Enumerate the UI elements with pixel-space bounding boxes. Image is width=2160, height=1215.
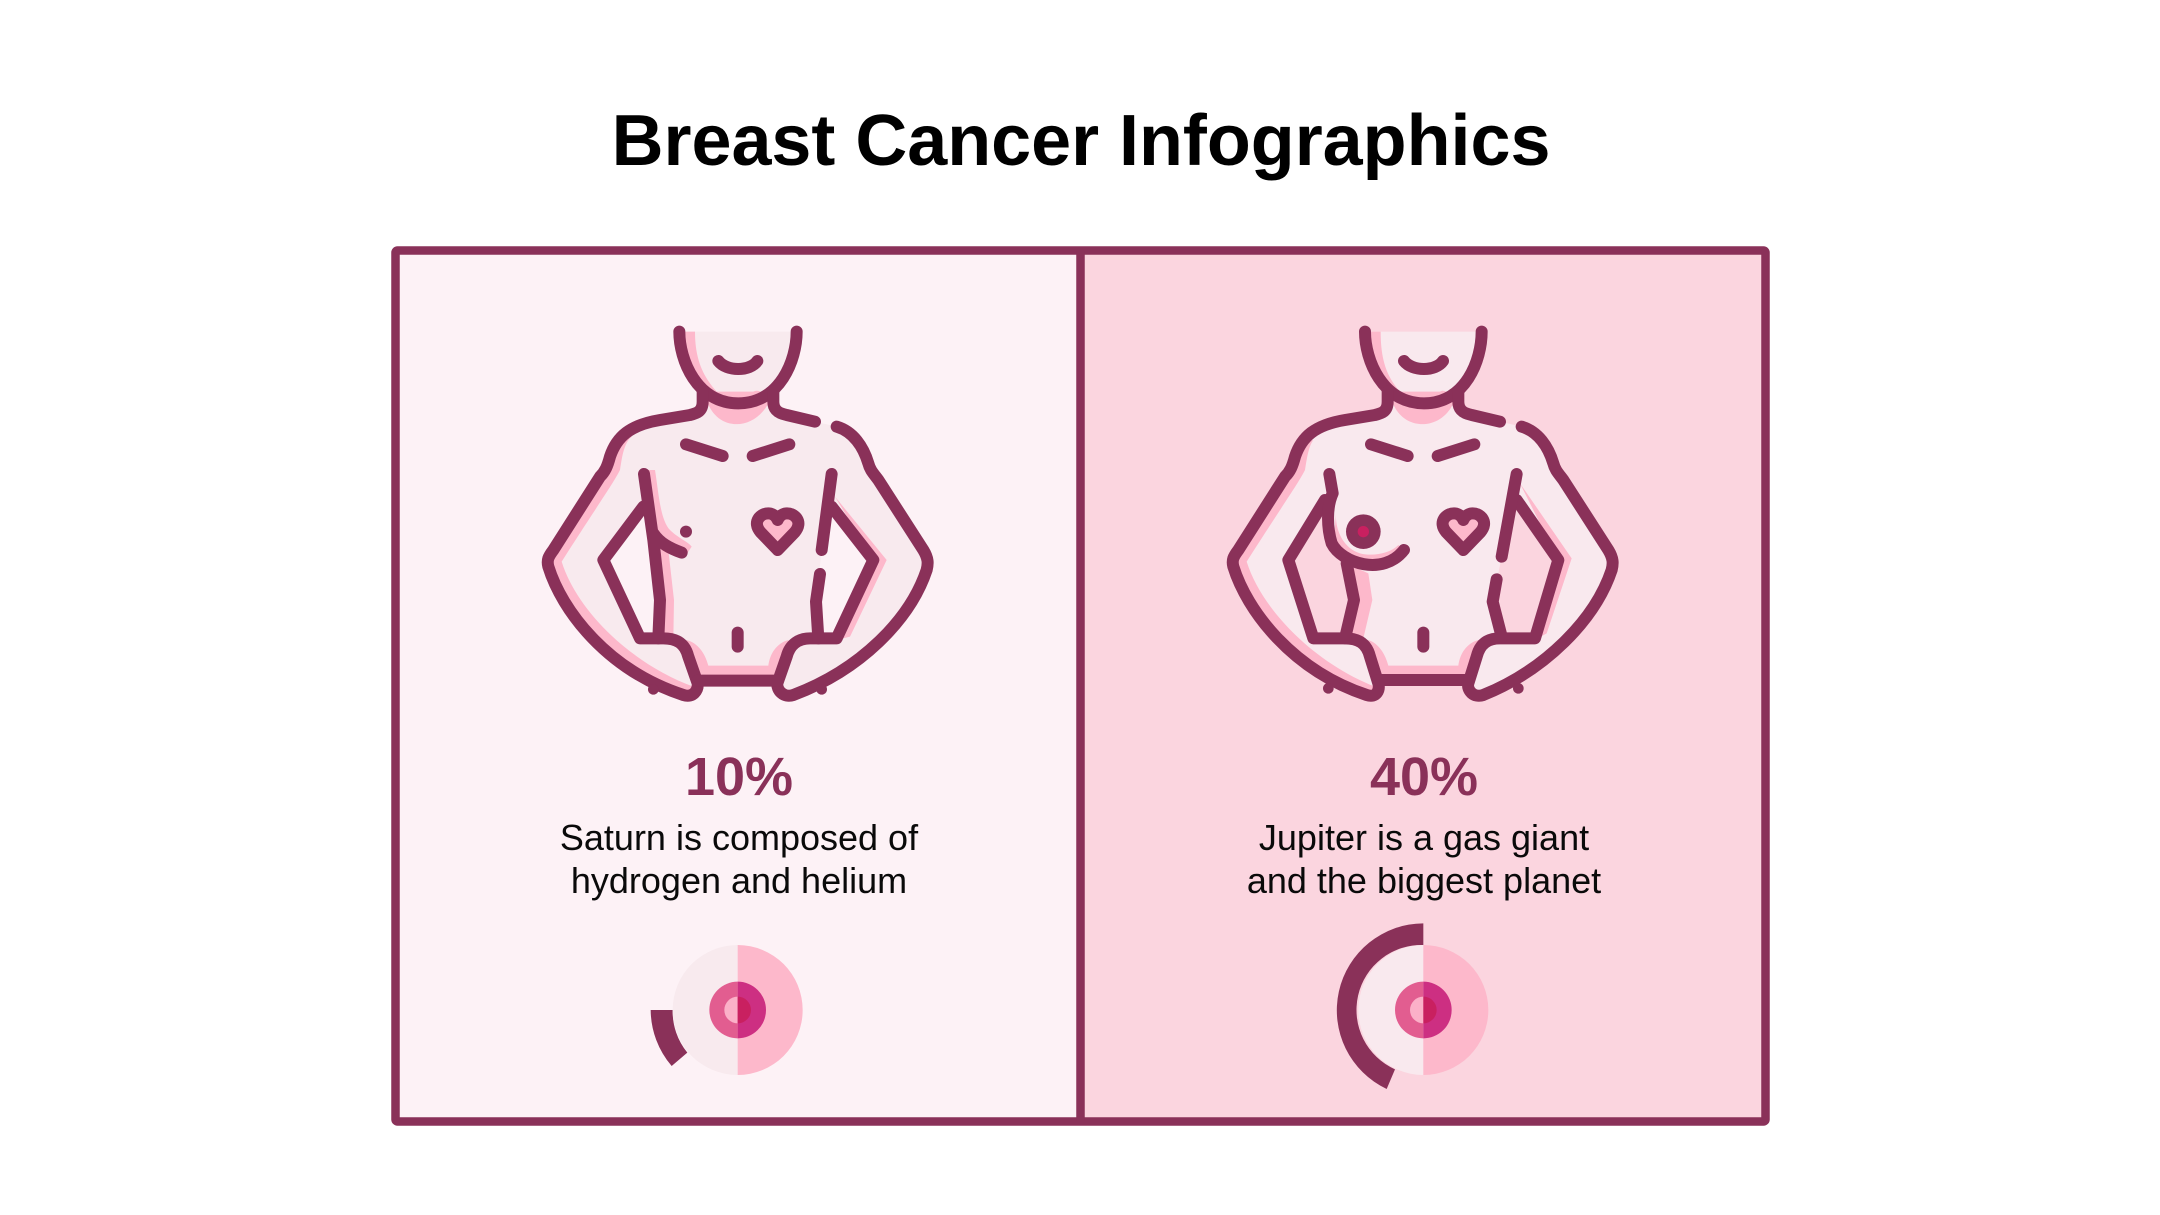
title: Breast Cancer Infographics — [612, 101, 1550, 181]
arm gaps — [1288, 500, 1558, 638]
icon: torso with breast — [1233, 332, 1613, 696]
text: Saturn description: hydrogen and helium — [571, 860, 907, 901]
donut chart: 40% — [1337, 923, 1488, 1089]
percentage: 40%: 40% — [1370, 747, 1478, 807]
panel: right background — [1080, 250, 1766, 1122]
text: Saturn description: Saturn is composed of — [560, 817, 919, 858]
left half — [1358, 945, 1423, 1075]
outlines — [548, 332, 928, 696]
progress arc — [651, 1010, 687, 1066]
heart — [757, 513, 798, 550]
body fill — [1233, 332, 1613, 695]
panel frame — [396, 250, 1766, 1122]
areola — [1346, 514, 1381, 549]
text: Jupiter description: Jupiter is a gas giant — [1259, 817, 1589, 858]
shadow shapes — [1233, 332, 1572, 695]
progress arc — [1337, 923, 1423, 1089]
text: Jupiter description: and the biggest planet — [1247, 860, 1601, 901]
outlines — [1233, 332, 1613, 696]
nubs — [1323, 683, 1524, 694]
percentage: 10%: 10% — [685, 747, 793, 807]
body fill — [548, 332, 928, 695]
donut chart: 10% — [651, 945, 803, 1075]
right half — [1423, 945, 1488, 1075]
panel: left background — [396, 250, 1080, 1122]
arm gaps — [603, 507, 873, 638]
scar mark and nubs — [648, 526, 827, 695]
icon: torso with breast removed — [548, 332, 928, 696]
left half — [673, 945, 738, 1075]
heart — [1443, 513, 1484, 550]
right half — [738, 945, 803, 1075]
shadow shapes — [548, 332, 887, 695]
